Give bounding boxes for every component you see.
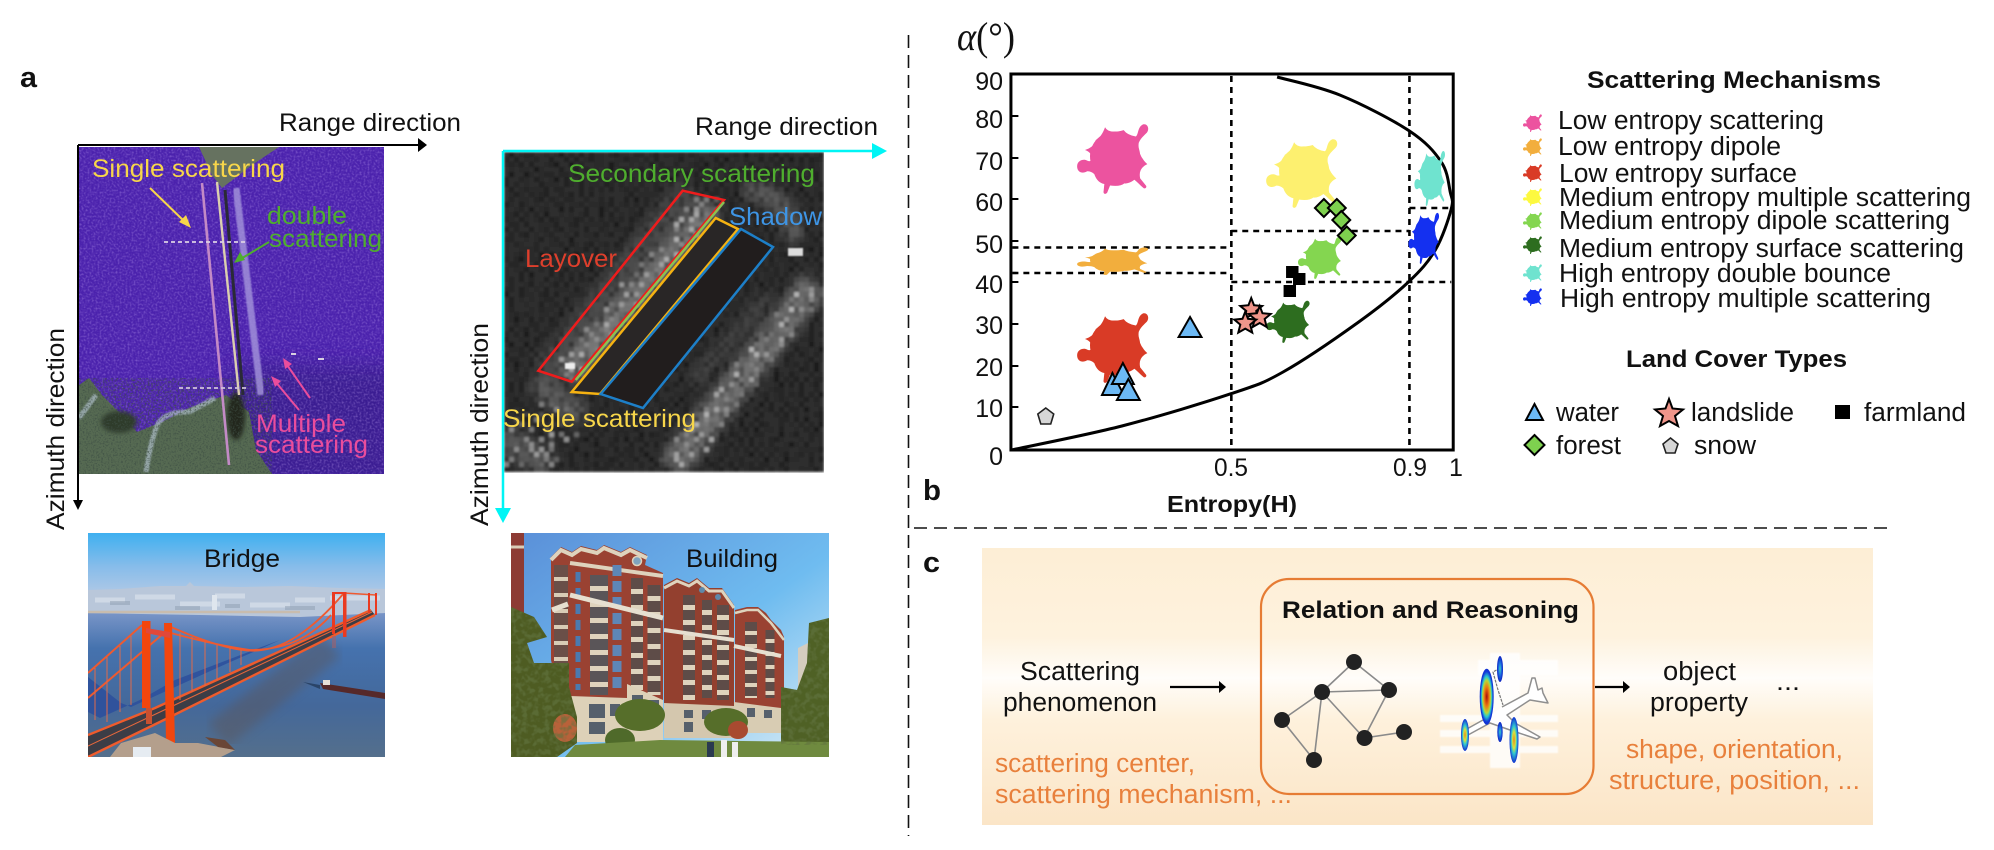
photo: bridge [88, 533, 385, 757]
clock and round windows [632, 556, 642, 566]
label: shadow: Shadow [729, 203, 823, 231]
y axis labels: 90 [975, 68, 1003, 96]
label: single scattering: Single scattering [92, 155, 285, 183]
label: multiple scattering: Multiple [256, 410, 346, 438]
markers: forest [1315, 199, 1356, 244]
zone: low entropy dipole [1077, 247, 1148, 275]
text: scattering center and mechanism: scattering mechanism, ... [995, 781, 1292, 809]
right neighbour [798, 643, 808, 687]
text: object property: object [1663, 658, 1736, 686]
label: single scattering: Single scattering [503, 405, 696, 433]
region outline: single scattering [572, 218, 738, 394]
building masses [551, 545, 663, 700]
text: scattering center and mechanism: scattering center, [995, 750, 1195, 778]
legend item: low entropy surface: Low entropy surface [1559, 160, 1797, 188]
y axis labels: 0 [989, 443, 1003, 471]
label: range direction: Range direction [695, 113, 878, 141]
label: layover: Layover [525, 245, 617, 273]
label: azimuth direction: Azimuth direction [466, 323, 494, 526]
text: ellipsis: ... [1776, 668, 1800, 696]
y axis title: α(°) [957, 14, 1015, 59]
panel divider: horizontal dashed line [914, 527, 1888, 529]
zone: low entropy scattering [1077, 124, 1148, 194]
axis arrow: azimuth direction (building) [495, 151, 511, 523]
legend item: snow [1663, 432, 1757, 460]
zone: medium entropy surface scattering [1266, 301, 1310, 343]
y axis labels: 60 [975, 189, 1003, 217]
label: double scattering: scattering [269, 225, 382, 253]
legend item: medium entropy dipole scattering: Medium entropy dipole scattering [1559, 207, 1950, 235]
cream bands [570, 595, 663, 618]
zone: high entropy double bounce [1414, 151, 1445, 206]
label: secondary scattering: Secondary scattering [568, 160, 815, 188]
region outline: secondary scattering [576, 202, 724, 380]
label: multiple scattering: scattering [255, 431, 368, 459]
label: double scattering: double [267, 202, 347, 230]
zone: medium entropy multiple scattering [1266, 139, 1337, 208]
x axis title: Entropy(H) [1167, 491, 1297, 517]
legend item: low entropy dipole: Low entropy dipole [1558, 133, 1781, 161]
x axis labels: 1 [1449, 454, 1463, 482]
photo: building [511, 533, 829, 757]
region outline: layover [538, 191, 724, 382]
legend title: Land Cover Types [1626, 346, 1847, 373]
central box: relation and reasoning [1261, 579, 1594, 794]
balconies [561, 565, 770, 700]
text: shape orientation structure position: structure, position, ... [1609, 767, 1860, 795]
zone: high entropy multiple scattering [1408, 213, 1439, 264]
panel b: H-alpha scatter plot [923, 14, 1463, 517]
box title: Relation and Reasoning [1282, 597, 1579, 624]
aircraft heatmap [1440, 653, 1558, 768]
legend item: medium entropy surface scattering: Medium entropy surface scattering [1559, 235, 1964, 263]
label: bridge: Bridge [204, 545, 280, 573]
y axis labels: 40 [975, 271, 1003, 299]
x axis labels: 0.5 [1214, 454, 1248, 482]
legend item: farmland: farmland [1864, 399, 1966, 427]
axis arrow: range direction (bridge) [78, 138, 427, 152]
relation graph [1274, 654, 1412, 768]
y axis labels: 30 [975, 312, 1003, 340]
legend item: medium entropy multiple scattering: Medium entropy multiple scattering [1559, 184, 1971, 212]
zone: low entropy surface [1077, 313, 1148, 383]
label: range direction: Range direction [279, 109, 461, 137]
axis arrow: range direction (building) [503, 143, 887, 159]
panel divider: vertical dashed line [908, 35, 910, 836]
y axis labels: 70 [975, 148, 1003, 176]
text: scattering phenomenon: Scattering [1020, 658, 1140, 686]
text: shape orientation structure position: shape, orientation, [1626, 736, 1843, 764]
trees [511, 607, 577, 757]
zone boundaries [1012, 76, 1451, 450]
y axis labels [975, 68, 1003, 471]
legend item: forest: forest [1556, 432, 1621, 460]
legend item: high entropy double bounce: High entropy double bounce [1559, 260, 1891, 288]
y axis labels: 20 [975, 354, 1003, 382]
markers: water [1102, 317, 1201, 400]
arrow: single scattering [150, 188, 191, 228]
legend item: low entropy scattering: Low entropy scattering [1558, 107, 1824, 135]
panel letter a: a [20, 62, 38, 94]
text: scattering phenomenon: phenomenon [1003, 689, 1157, 717]
zone: medium entropy dipole scattering [1298, 237, 1341, 279]
text: object property: property [1650, 689, 1748, 717]
legend title: Scattering Mechanisms [1587, 67, 1881, 94]
SAR image: bridge [79, 147, 400, 485]
legend: scattering mechanisms [1523, 67, 1971, 313]
SAR image: building [504, 152, 824, 473]
legend item: water [1526, 399, 1620, 427]
x axis labels: 0.9 [1393, 454, 1427, 482]
y axis labels: 10 [975, 395, 1003, 423]
y tick marks [1011, 116, 1018, 407]
legend item: water: water [1555, 399, 1620, 427]
panel letter c: c [923, 547, 940, 579]
label: azimuth direction: Azimuth direction [42, 328, 70, 530]
panel letter b: b [923, 475, 941, 507]
arrow: relation to property [1595, 681, 1630, 693]
markers: landslide [1234, 298, 1271, 333]
legend: land cover types [1524, 346, 1966, 460]
arrows: multiple scattering [271, 358, 310, 410]
plot area [1011, 74, 1453, 450]
region outline: shadow [601, 229, 773, 408]
arrow: phenomenon to relation [1170, 681, 1226, 693]
parapets [551, 548, 663, 576]
arrow: double scattering [234, 242, 269, 263]
markers: farmland [1284, 266, 1305, 297]
panel a [20, 62, 887, 757]
y axis labels: 50 [975, 231, 1003, 259]
marker: snow [1038, 408, 1054, 424]
y axis labels: 80 [975, 106, 1003, 134]
panel c: relation and reasoning flow [923, 547, 1873, 825]
legend item: forest [1524, 432, 1621, 460]
feasible boundary curve [1011, 77, 1452, 450]
legend item: high entropy multiple scattering: High entropy multiple scattering [1560, 285, 1931, 313]
legend item: landslide: landslide [1691, 399, 1794, 427]
x axis labels [1214, 454, 1463, 482]
plot frame [1011, 74, 1453, 450]
scattering zones [1077, 124, 1445, 383]
legend item: snow: snow [1694, 432, 1757, 460]
label: building: Building [686, 545, 778, 573]
panel background [982, 548, 1873, 825]
axis arrow: azimuth direction (bridge) [73, 145, 83, 510]
